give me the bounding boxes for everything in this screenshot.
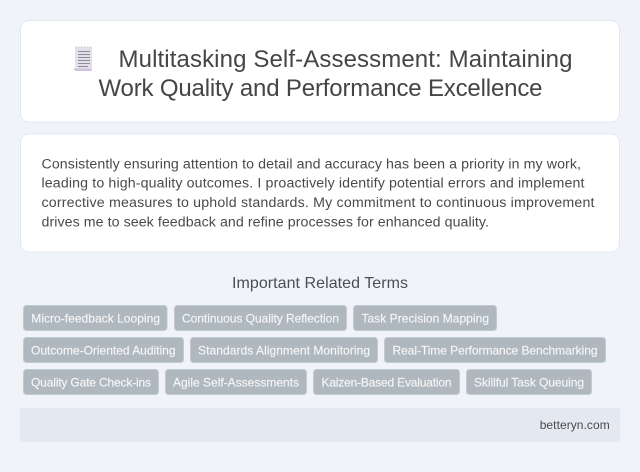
- tag: [166, 370, 306, 394]
- tag: [466, 370, 592, 394]
- description text: corrective measures to uphold standards. My commitment to continuous improvement: [42, 195, 595, 211]
- tag: [174, 306, 346, 330]
- title: Work Quality and Performance Excellence: [98, 75, 542, 102]
- icon: document scroll: [74, 47, 92, 71]
- tag: [24, 370, 158, 394]
- tag: [24, 306, 167, 330]
- tag: [314, 370, 460, 394]
- description text: [42, 156, 595, 230]
- tag: Real-Time Performance Benchmarking: [392, 343, 598, 357]
- panel: title card: [20, 20, 620, 122]
- tag: [384, 338, 606, 362]
- panel: description card: [20, 134, 620, 252]
- tag: [190, 338, 378, 362]
- tag: Task Precision Mapping: [362, 311, 489, 325]
- tag: [24, 338, 184, 362]
- description text: Consistently ensuring attention to detail and accuracy has been a priority in my work,: [42, 156, 581, 172]
- tag: Agile Self-Assessments: [173, 375, 299, 389]
- tag: Outcome-Oriented Auditing: [31, 343, 176, 357]
- tag: Quality Gate Check-ins: [31, 375, 151, 389]
- heading: related terms: Important Related Terms: [232, 275, 408, 292]
- tag: Micro-feedback Looping: [31, 311, 160, 325]
- footer source: betteryn.com: [540, 418, 610, 432]
- title: [98, 46, 572, 102]
- tag: Skillful Task Queuing: [474, 375, 584, 389]
- tag: [354, 306, 496, 330]
- description text: leading to high-quality outcomes. I proactively identify potential errors and implement: [42, 176, 585, 192]
- title: Multitasking Self-Assessment: Maintaining: [118, 46, 572, 73]
- description text: drives me to seek feedback and refine processes for enhanced quality.: [42, 214, 489, 230]
- tag: Standards Alignment Monitoring: [198, 343, 370, 357]
- footer: [20, 408, 620, 442]
- tag: Continuous Quality Reflection: [182, 311, 339, 325]
- tag: Kaizen-Based Evaluation: [322, 375, 452, 389]
- tags: related terms: [24, 306, 606, 394]
